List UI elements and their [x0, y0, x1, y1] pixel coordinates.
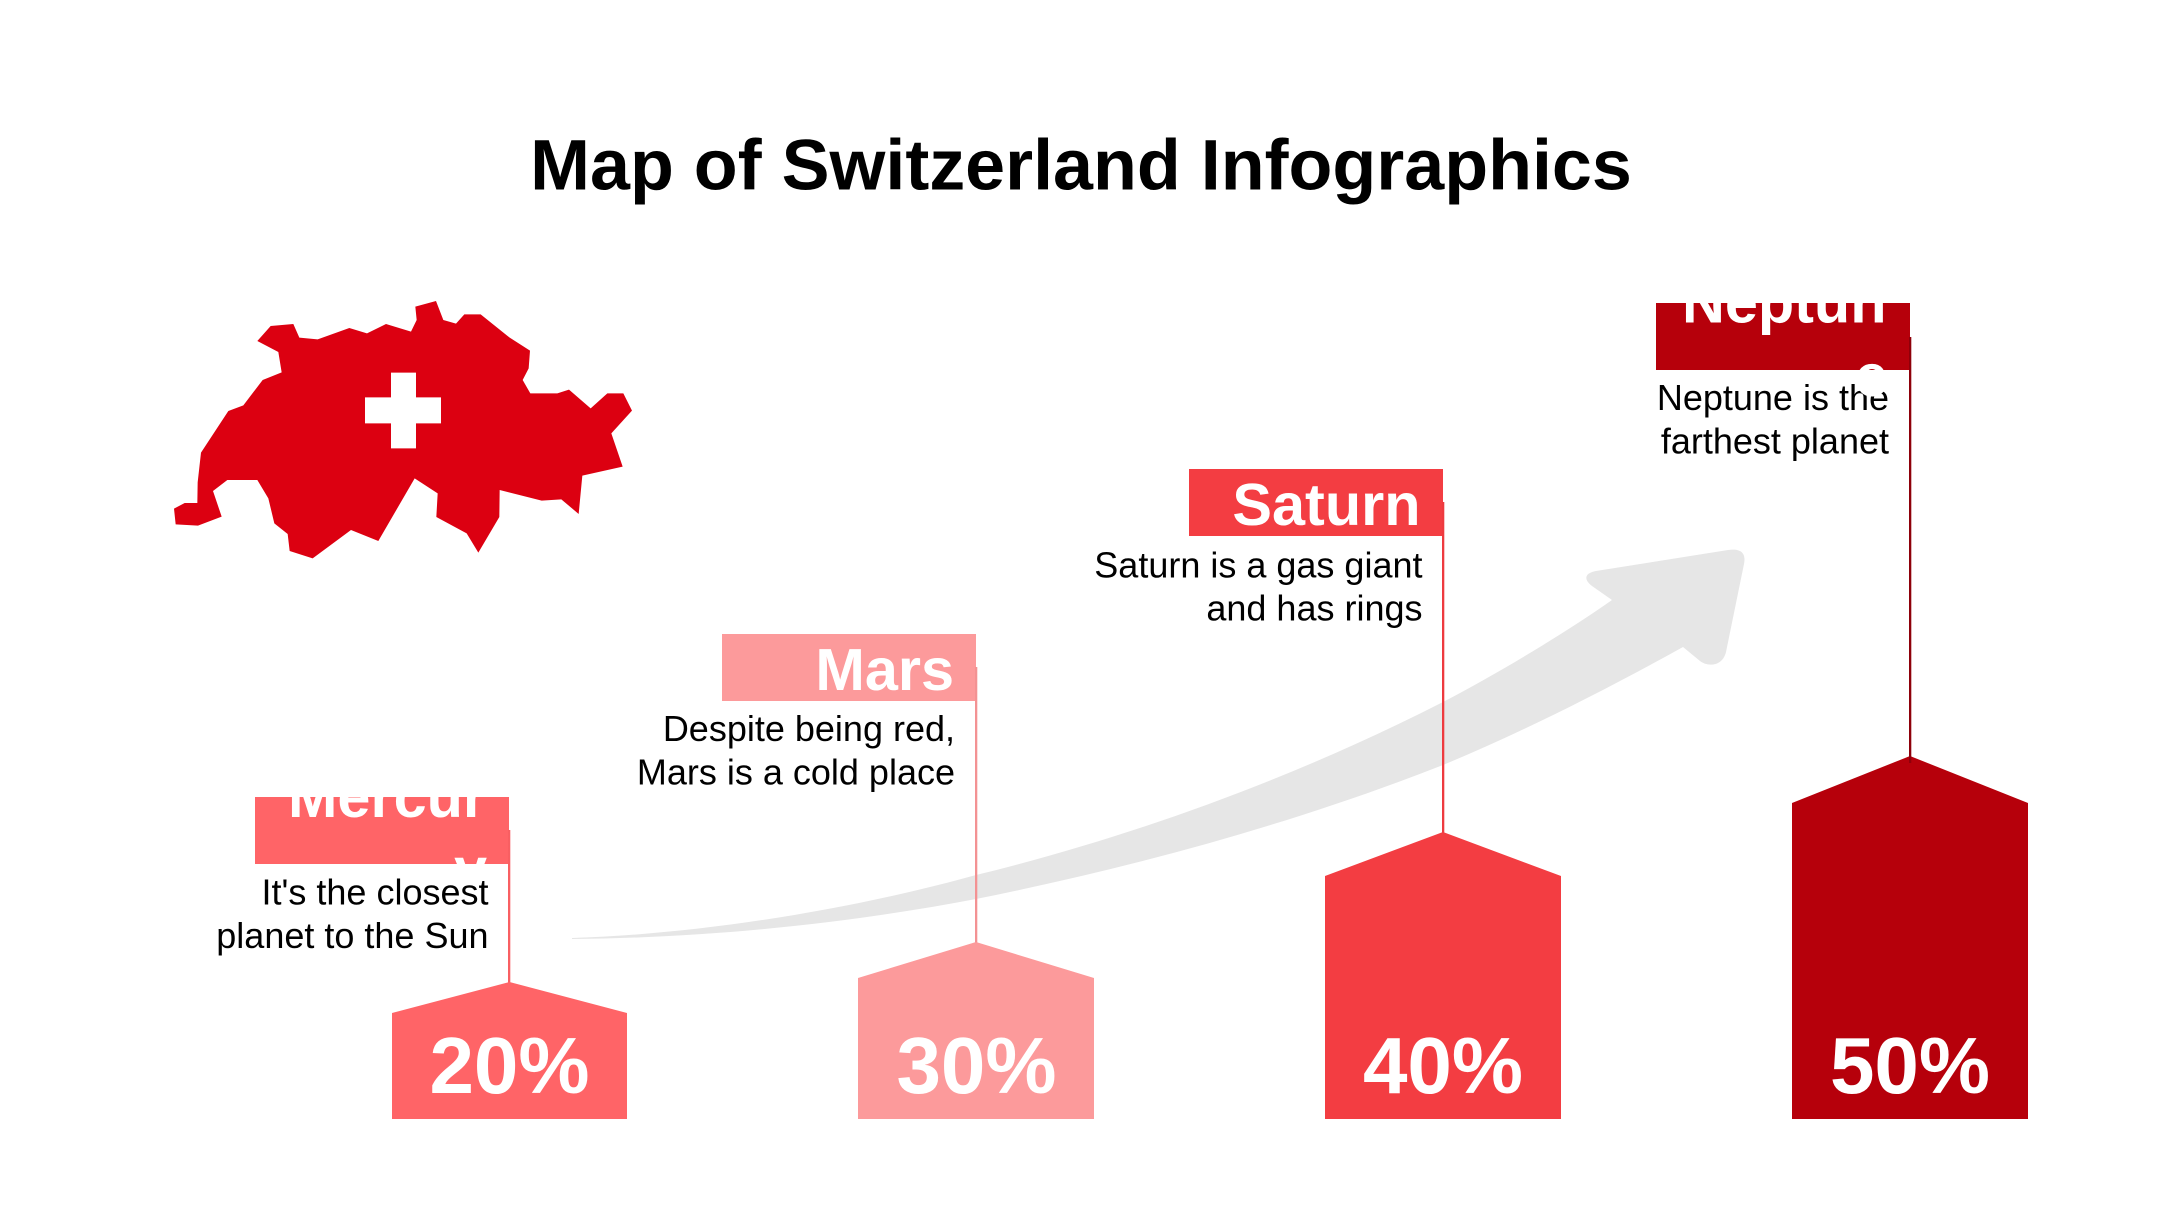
Neptune value: 50% [1830, 1021, 1990, 1110]
column: Saturn 40% [1094, 469, 1561, 1119]
Neptune connector line [1909, 337, 1911, 763]
column: Mars 30% [637, 634, 1094, 1119]
Saturn label: Saturn [1232, 471, 1420, 538]
Mars label [722, 634, 976, 703]
column: Mercury 20% [216, 763, 627, 1119]
Saturn pentagon [1325, 832, 1561, 1119]
Mercury value: 20% [429, 1021, 590, 1110]
Mars description: Mars is a cold place [637, 751, 955, 792]
Mars value: 30% [896, 1021, 1057, 1110]
Neptune label [1656, 268, 1910, 409]
column: Neptune 50% [1656, 268, 2028, 1119]
Mercury connector line [508, 830, 510, 984]
Neptune label: e [1855, 342, 1888, 409]
Saturn value: 40% [1363, 1021, 1523, 1110]
Neptune description: farthest planet [1661, 420, 1889, 461]
Mercury pentagon [392, 982, 627, 1119]
Mercury label: y [454, 835, 487, 902]
Saturn connector line [1442, 502, 1444, 834]
Mercury description: planet to the Sun [216, 915, 488, 956]
Neptune description: Neptune is the [1657, 377, 1889, 418]
Mars label: Mars [815, 636, 954, 703]
Mars connector line [975, 667, 977, 944]
Neptune label: Neptun [1682, 268, 1886, 336]
Saturn description: Saturn is a gas giant [1094, 544, 1422, 586]
Neptune pentagon [1792, 756, 2028, 1119]
Mercury description: It's the closest [262, 872, 488, 912]
Saturn description: and has rings [1206, 588, 1422, 628]
Mercury label: Mercur [288, 763, 486, 830]
Mars description: Despite being red, [663, 708, 955, 749]
title: Map of Switzerland Infographics [530, 126, 1632, 206]
Mars pentagon [858, 942, 1094, 1119]
arrow: rising trend [572, 550, 1744, 939]
Mercury label [255, 763, 509, 902]
map of Switzerland with cross [174, 301, 632, 558]
